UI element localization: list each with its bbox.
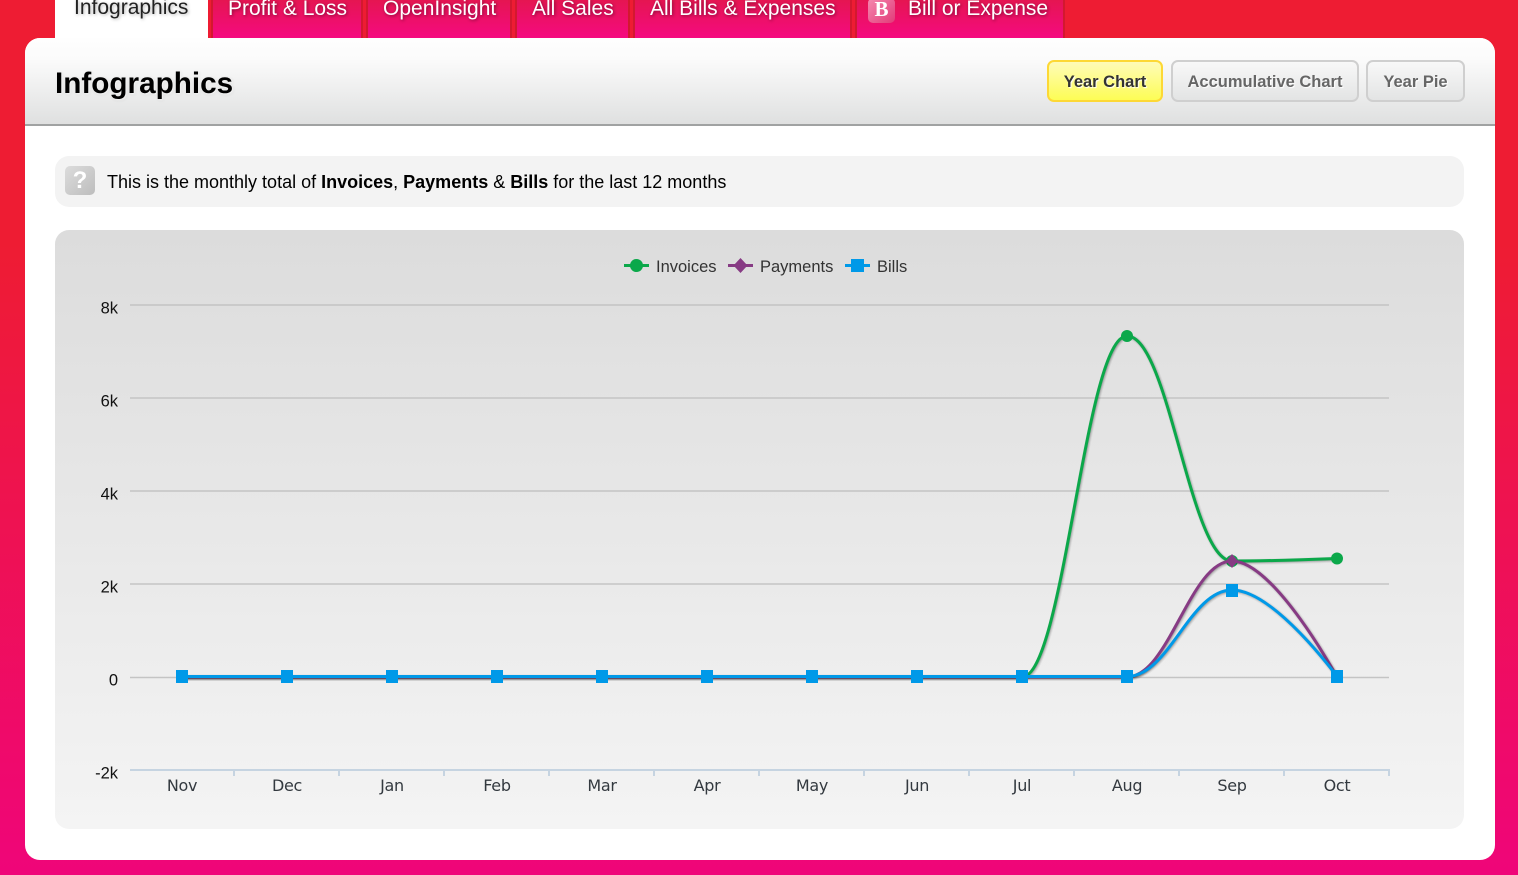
panel header xyxy=(25,38,1495,126)
heading: Infographics xyxy=(55,67,233,100)
legend: Payments xyxy=(760,258,833,276)
y axis labels: 6k xyxy=(101,392,119,410)
legend: Bills xyxy=(877,258,907,276)
x axis xyxy=(130,770,1390,795)
x axis labels: Mar xyxy=(587,776,617,795)
chart panel xyxy=(55,230,1464,829)
y axis labels: 0 xyxy=(109,672,118,690)
series: Bills xyxy=(176,584,1343,683)
y axis labels: -2k xyxy=(95,764,119,782)
button: Year Chart xyxy=(1047,60,1163,102)
x axis labels: Sep xyxy=(1217,776,1247,795)
y axis labels: 2k xyxy=(101,578,119,596)
x axis labels: Aug xyxy=(1112,776,1142,795)
button: Year Pie xyxy=(1366,60,1465,102)
x axis labels: Nov xyxy=(167,776,197,795)
series: Invoices xyxy=(182,330,1343,678)
button: Year Chart: Year Chart xyxy=(1064,73,1146,91)
tab: All Sales xyxy=(515,0,630,38)
series: Payments xyxy=(182,554,1338,678)
info box xyxy=(55,156,1464,207)
tab: OpenInsight xyxy=(366,0,512,38)
x axis labels: Apr xyxy=(694,776,721,795)
icon: help question mark: ? xyxy=(73,167,87,194)
icon: help question mark xyxy=(65,166,95,195)
info text: This is the monthly total of Invoices, Payments & Bills for the last 12 months xyxy=(107,172,726,192)
legend xyxy=(624,258,907,276)
x axis labels: Oct xyxy=(1324,776,1350,795)
button: Accumulative Chart xyxy=(1171,60,1359,102)
x axis labels: Jan xyxy=(379,776,404,795)
y axis labels: 8k xyxy=(101,300,119,318)
x axis labels: May xyxy=(796,776,828,795)
legend: Invoices xyxy=(656,258,717,276)
x axis labels: Feb xyxy=(483,776,511,795)
button: Year Pie: Year Pie xyxy=(1383,73,1448,91)
button: Accumulative Chart: Accumulative Chart xyxy=(1188,73,1342,91)
icon: bill B xyxy=(868,0,895,23)
x axis labels xyxy=(167,776,1350,795)
y axis labels: 4k xyxy=(101,486,119,504)
y axis labels xyxy=(95,300,119,782)
navigation tabs xyxy=(55,0,1065,38)
x axis labels: Jun xyxy=(904,776,929,795)
x axis labels: Dec xyxy=(272,776,302,795)
tab: Bill or Expense xyxy=(855,0,1065,38)
tab: All Bills & Expenses xyxy=(633,0,852,38)
tab: Infographics xyxy=(55,0,208,38)
x axis labels: Jul xyxy=(1012,776,1031,795)
tab: Profit & Loss xyxy=(211,0,363,38)
